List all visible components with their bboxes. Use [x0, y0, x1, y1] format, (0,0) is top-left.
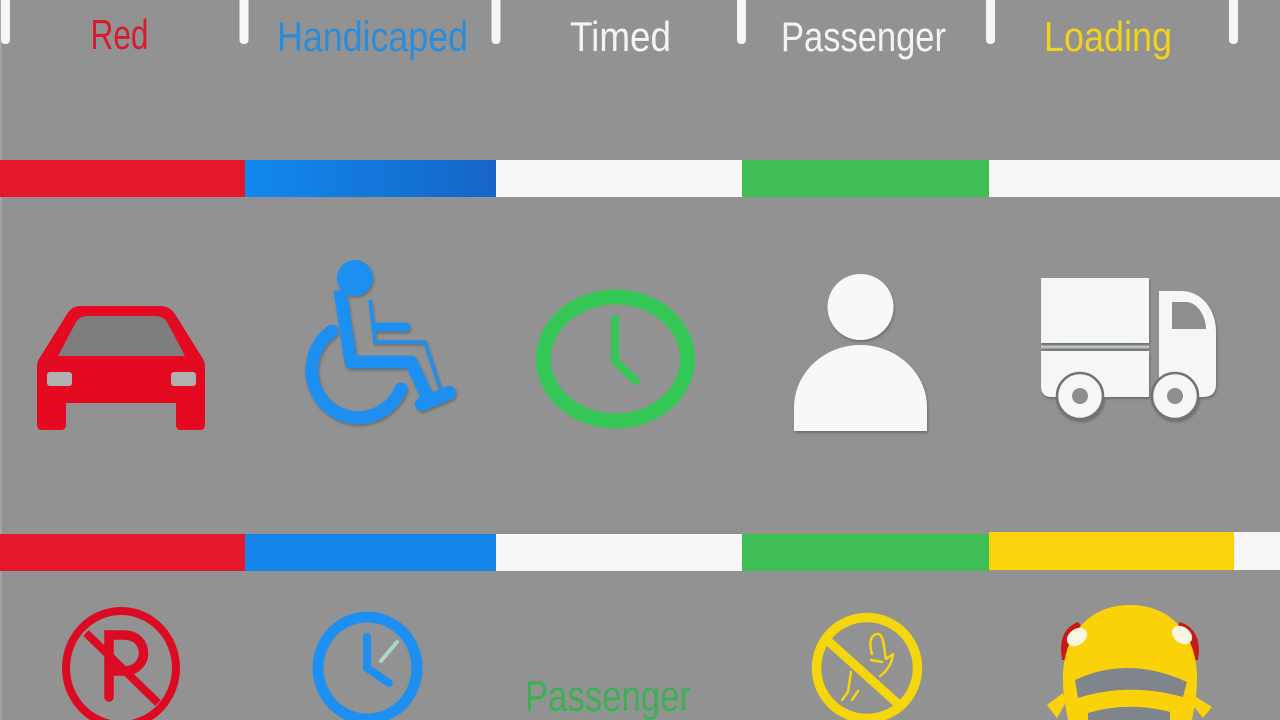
heading labels: Loading: [1044, 13, 1172, 60]
icon: white person: [794, 274, 927, 431]
icon: blue clock: [318, 617, 417, 719]
icon: white truck: [1041, 278, 1216, 419]
heading labels: [90, 11, 1172, 60]
icon: green clock: [544, 297, 688, 421]
upper color bar: [0, 160, 1280, 197]
icon: red car: [37, 306, 205, 430]
heading labels: Timed: [570, 13, 671, 60]
icon: no parking sign: [66, 611, 176, 720]
heading labels: Passenger: [781, 13, 946, 60]
heading labels: Red: [90, 11, 148, 58]
lower color bar: [0, 532, 1280, 571]
top curb tick marks: [1, 0, 1238, 44]
icon: yellow car, top view: [1047, 605, 1212, 720]
heading labels: Handicaped: [277, 13, 468, 60]
passenger label, green: Passenger: [525, 672, 691, 720]
icon: blue wheelchair: [312, 260, 449, 418]
icon: no hand sign: [816, 618, 918, 718]
